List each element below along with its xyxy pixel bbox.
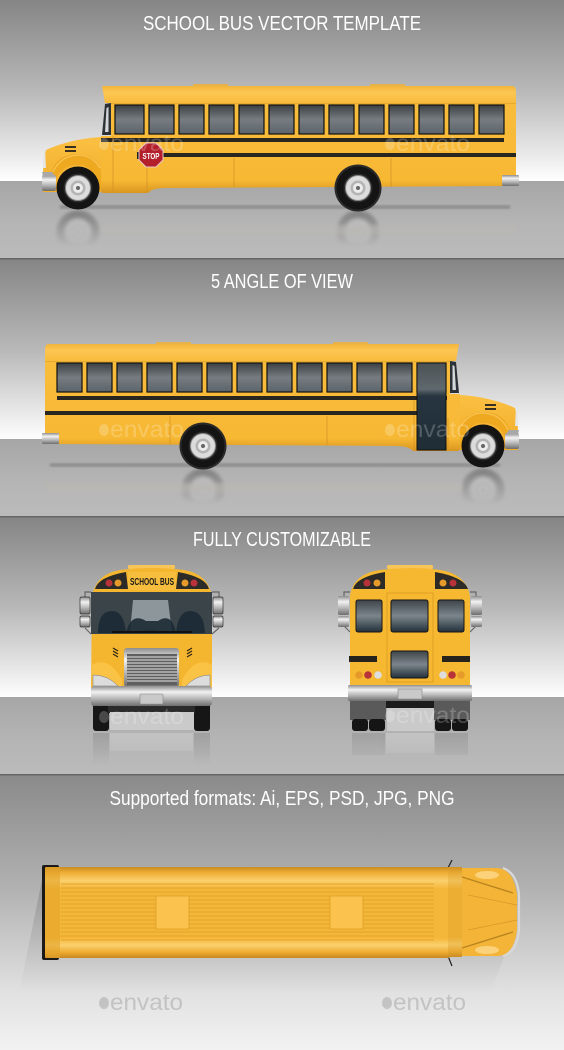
watermarks: envato [396, 130, 470, 156]
grille [124, 648, 179, 687]
reflections [93, 733, 468, 765]
panel: top view [0, 775, 564, 1050]
icon: stop sign [137, 143, 163, 167]
panel separators [0, 258, 564, 776]
watermarks: envato [110, 130, 184, 156]
top marker lights [364, 580, 370, 586]
vents [113, 648, 192, 657]
hood [460, 868, 517, 956]
cast shadow [20, 880, 505, 993]
wheels [352, 719, 368, 731]
nose chrome [503, 868, 519, 956]
wheels [93, 700, 109, 731]
watermarks: envato [110, 416, 184, 442]
stripe patches [447, 394, 460, 418]
sign: school bus: SCHOOL BUS [130, 577, 174, 588]
ground shadow [50, 463, 500, 467]
icon: stop sign: STOP [142, 151, 160, 161]
roof cap [387, 565, 433, 569]
illustration: school bus right side [42, 342, 519, 470]
body [350, 568, 470, 690]
panel: side view left [0, 0, 564, 258]
reflection [46, 468, 504, 512]
rear edge [42, 865, 59, 960]
roof hatches [156, 896, 189, 929]
marker lights [106, 580, 112, 586]
body [91, 568, 212, 690]
door [417, 363, 446, 450]
mirrors [85, 592, 219, 634]
watermarks: envato [396, 702, 470, 728]
stripes [349, 656, 377, 662]
bumper [91, 686, 212, 706]
mirrors [344, 592, 476, 632]
heading: school bus vector template: SCHOOL BUS VECTOR TEMPLATE [143, 13, 421, 35]
headlights [93, 675, 118, 686]
illustration: bus front [80, 565, 223, 731]
illustration: school bus left side [42, 84, 519, 212]
panel: front and rear views [0, 517, 564, 774]
watermarks: envato [110, 989, 183, 1015]
door outline [387, 593, 433, 682]
windshield [91, 592, 212, 634]
rear lights [355, 671, 363, 679]
sign: school bus [128, 572, 176, 590]
bumper [348, 685, 472, 701]
roof ribs [61, 884, 434, 940]
mirrors [448, 860, 452, 966]
cowl [448, 867, 462, 957]
illustration: bus top [42, 860, 519, 966]
panel: side view right [0, 259, 564, 516]
ground shadow [60, 205, 510, 209]
watermarks: envato [110, 703, 184, 729]
body [45, 867, 450, 958]
fender highlights [475, 871, 499, 879]
sign band [95, 572, 128, 589]
heading: supported formats: Supported formats: Ai, EPS, PSD, JPG, PNG [110, 788, 454, 810]
roof cap [128, 565, 175, 569]
heading: fully customizable: FULLY CUSTOMIZABLE [193, 529, 371, 551]
watermarks [99, 130, 470, 1015]
illustration: bus rear [338, 565, 482, 731]
reflection [56, 210, 515, 254]
mudflaps [350, 700, 386, 720]
hood shading [92, 662, 122, 690]
heading: 5 angle of view: 5 ANGLE OF VIEW [211, 271, 353, 293]
windows [356, 600, 382, 632]
corner bands [353, 572, 385, 589]
watermarks: envato [396, 416, 470, 442]
watermarks: envato [393, 989, 466, 1015]
